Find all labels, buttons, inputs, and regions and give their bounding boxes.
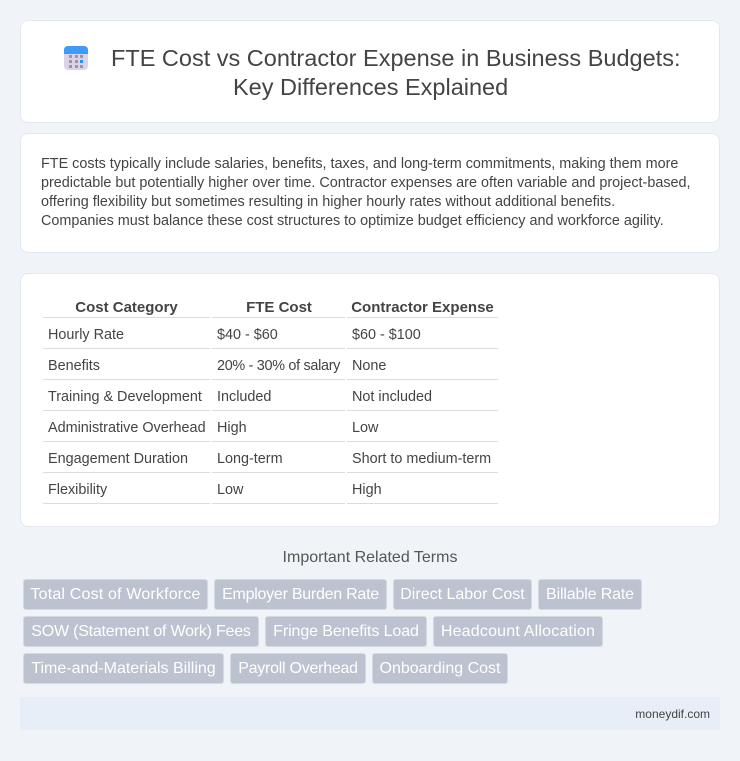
tag group: related terms: Fringe Benefits Load bbox=[273, 623, 419, 640]
table: cost comparison: Hourly Rate bbox=[48, 327, 124, 343]
table: cost comparison: High bbox=[352, 482, 382, 498]
table: cost comparison: Flexibility bbox=[48, 482, 107, 498]
table: cost comparison bbox=[43, 299, 498, 504]
table: cost comparison: Contractor Expense bbox=[351, 299, 494, 316]
table: cost comparison: Low bbox=[217, 482, 243, 498]
title bbox=[111, 45, 680, 100]
tag group: related terms: Time-and-Materials Billing bbox=[31, 660, 216, 677]
table: cost comparison: Benefits bbox=[48, 358, 100, 374]
table: cost comparison: $40 - $60 bbox=[217, 327, 278, 343]
footer bar bbox=[20, 697, 720, 730]
text block: intro: FTE costs typically include salaries, benefits, taxes, and long-term commitments, making them more bbox=[41, 156, 678, 172]
table: cost comparison: Engagement Duration bbox=[48, 451, 188, 467]
text block: intro bbox=[41, 156, 691, 229]
table: cost comparison: Administrative Overhead bbox=[48, 420, 206, 436]
table: cost comparison: 20% - 30% of salary bbox=[217, 358, 340, 374]
tag group: related terms: Direct Labor Cost bbox=[400, 586, 525, 603]
text block: intro: predictable but potentially higher over time. Contractor expenses are often variable and project-based, bbox=[41, 175, 691, 191]
text block: intro: offering flexibility but sometimes resulting in higher hourly rates without additional benefits. bbox=[41, 194, 615, 210]
table: cost comparison: Not included bbox=[352, 389, 432, 405]
table: cost comparison: High bbox=[217, 420, 247, 436]
tag group: related terms: Employer Burden Rate bbox=[222, 586, 379, 603]
heading: related terms: Important Related Terms bbox=[283, 549, 457, 566]
panel: intro paragraph bbox=[20, 133, 720, 253]
tag group: related terms: Billable Rate bbox=[546, 586, 634, 603]
table: cost comparison: Cost Category bbox=[75, 299, 178, 316]
tag group: related terms: Headcount Allocation bbox=[441, 623, 595, 640]
tag group: related terms bbox=[23, 579, 642, 684]
panel: title card bbox=[20, 20, 720, 123]
table: cost comparison: None bbox=[352, 358, 386, 374]
table: cost comparison: FTE Cost bbox=[246, 299, 312, 316]
table: cost comparison: Long-term bbox=[217, 451, 283, 467]
table: cost comparison: Included bbox=[217, 389, 271, 405]
panel: comparison table bbox=[20, 273, 720, 527]
table: cost comparison: $60 - $100 bbox=[352, 327, 421, 343]
tag group: related terms: Payroll Overhead bbox=[238, 660, 358, 677]
text block: intro: Companies must balance these cost structures to optimize budget efficiency and workforce agility. bbox=[41, 213, 664, 229]
tag group: related terms: SOW (Statement of Work) Fees bbox=[31, 623, 251, 640]
table: cost comparison: Short to medium-term bbox=[352, 451, 491, 467]
table: cost comparison: Training & Development bbox=[48, 389, 202, 405]
tag group: related terms: Onboarding Cost bbox=[380, 660, 500, 677]
icon: calendar bbox=[64, 46, 88, 70]
title: FTE Cost vs Contractor Expense in Business Budgets: bbox=[111, 45, 680, 71]
tag group: related terms: Total Cost of Workforce bbox=[30, 586, 201, 603]
table: cost comparison: Low bbox=[352, 420, 378, 436]
title: Key Differences Explained bbox=[233, 74, 508, 100]
footer source text: moneydif.com bbox=[635, 707, 710, 721]
